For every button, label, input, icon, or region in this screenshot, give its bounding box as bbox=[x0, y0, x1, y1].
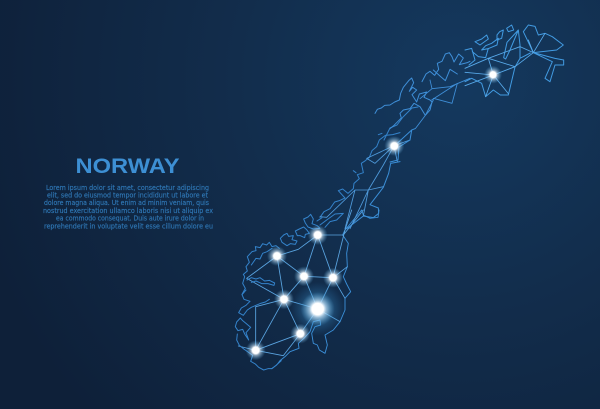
light: southern city 4 bbox=[323, 268, 343, 288]
light: southern city 5 bbox=[274, 289, 294, 309]
central region coast, islands and network bbox=[320, 133, 410, 229]
central-north link: coast and border bbox=[384, 107, 418, 162]
Finnmark coast, islands and network bbox=[465, 25, 564, 97]
description: dolore magna aliqua. Ut enim ad minim veniam, quis bbox=[44, 199, 209, 207]
map of Norway bbox=[235, 25, 564, 370]
light: southern city 2 bbox=[267, 246, 287, 266]
Nordland coast and islands bbox=[375, 53, 470, 129]
light: southern city 7 bbox=[246, 340, 266, 360]
light: southern city 6 bbox=[290, 324, 310, 344]
southern region east border and network bbox=[238, 210, 379, 369]
light: middle city bbox=[384, 136, 404, 156]
light: capital bbox=[301, 292, 335, 326]
text block: title and description bbox=[43, 155, 213, 231]
description: ea commodo consequat. Duis aute irure dolor in bbox=[56, 215, 204, 223]
light: southern city 1 bbox=[308, 225, 328, 245]
light: capital glow bbox=[291, 282, 345, 336]
description: Lorem ipsum dolor sit amet, consectetur adipiscing bbox=[46, 184, 209, 192]
description: reprehenderit in voluptate velit esse cillum dolore eu bbox=[44, 223, 213, 231]
description: elit, sed do eiusmod tempor incididunt ut labore et bbox=[47, 192, 208, 200]
city lights bbox=[246, 66, 502, 360]
south-west coast and islands bbox=[242, 214, 322, 294]
title: NORWAY bbox=[76, 155, 180, 178]
light: north city bbox=[484, 66, 502, 84]
south-west lower coast and islands bbox=[235, 290, 281, 370]
description: nostrud exercitation ullamco laboris nisi ut aliquip ex bbox=[43, 207, 213, 215]
description bbox=[43, 184, 213, 231]
light: southern city 3 bbox=[294, 266, 314, 286]
